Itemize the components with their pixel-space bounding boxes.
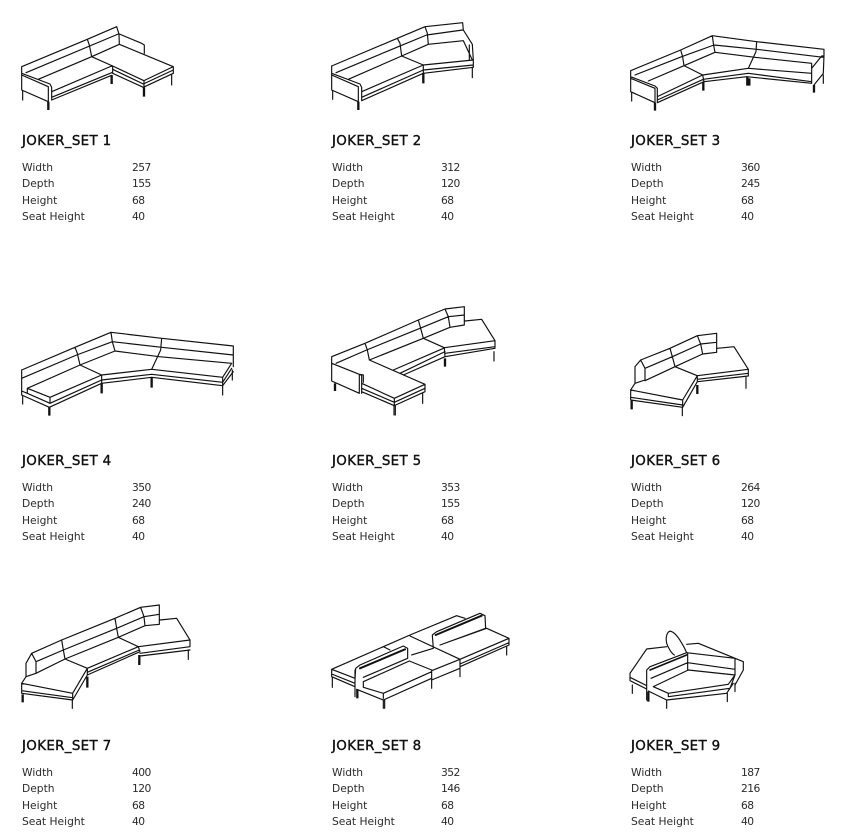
specs: set 9: 40 <box>741 815 754 828</box>
specs: set 7: Depth <box>22 782 55 795</box>
specs: set 9: Depth <box>631 782 664 795</box>
specs: set 6: Width <box>631 481 662 494</box>
specs: set 2: Seat Height <box>332 210 395 223</box>
specs: set 3: JOKER_SET 3 <box>630 134 720 149</box>
specs: set 8: JOKER_SET 8 <box>331 739 422 754</box>
specs: set 1: 40 <box>132 210 145 223</box>
specs: set 3: 245 <box>741 177 760 190</box>
specs: set 8: 352 <box>441 766 460 779</box>
specs: set 9: JOKER_SET 9 <box>630 739 720 754</box>
specs: set 2: Height <box>332 194 367 207</box>
specs: set 1: Depth <box>22 177 55 190</box>
specs: set 8: Seat Height <box>332 815 395 828</box>
sofa illustration: set 3 <box>631 36 824 111</box>
specs: set 4: 350 <box>132 481 151 494</box>
specs: set 7: 120 <box>132 782 151 795</box>
specs: set 2: JOKER_SET 2 <box>331 134 422 149</box>
specs: set 4: Height <box>22 514 57 527</box>
specs: set 2: 120 <box>441 177 460 190</box>
specs: set 4: 240 <box>132 497 151 510</box>
specs: set 5: 68 <box>441 514 454 527</box>
sofa illustration: set 6 <box>631 333 748 416</box>
specs: set 9: 68 <box>741 799 754 812</box>
specs: set 7: 400 <box>132 766 151 779</box>
specs: set 7: 68 <box>132 799 145 812</box>
specs: set 3: Width <box>631 161 662 174</box>
sofa illustration: set 9 <box>630 631 743 708</box>
specs: set 8: 40 <box>441 815 454 828</box>
specs: set 4: Seat Height <box>22 530 85 543</box>
specs: set 7: 40 <box>132 815 145 828</box>
specs: set 8: 146 <box>441 782 460 795</box>
specs: set 1: 155 <box>132 177 151 190</box>
specs: set 6: 40 <box>741 530 754 543</box>
specs: set 5: 40 <box>441 530 454 543</box>
specs: set 2: Width <box>332 161 363 174</box>
specs: set 8: 68 <box>441 799 454 812</box>
sofa illustration: set 8 <box>332 613 509 708</box>
specs: set 7 <box>21 739 151 828</box>
specs: set 4: JOKER_SET 4 <box>21 454 112 469</box>
specs: set 6: 68 <box>741 514 754 527</box>
specs: set 5: Depth <box>332 497 365 510</box>
specs: set 2: 40 <box>441 210 454 223</box>
specs: set 3 <box>630 134 760 223</box>
specs: set 3: 68 <box>741 194 754 207</box>
specs: set 7: Seat Height <box>22 815 85 828</box>
sofa illustration: set 5 <box>332 307 495 415</box>
specs: set 6: Seat Height <box>631 530 694 543</box>
sofa illustration: set 1 <box>22 27 173 110</box>
specs: set 2: 68 <box>441 194 454 207</box>
specs: set 9 <box>630 739 760 828</box>
specs: set 6 <box>630 454 760 543</box>
specs: set 5: Width <box>332 481 363 494</box>
specs: set 2 <box>331 134 460 223</box>
specs: set 1: Width <box>22 161 53 174</box>
specs: set 1: 257 <box>132 161 151 174</box>
specs: set 6: Depth <box>631 497 664 510</box>
specs: set 2: 312 <box>441 161 460 174</box>
specs: set 7: Height <box>22 799 57 812</box>
specs: set 8: Height <box>332 799 367 812</box>
specs: set 3: 360 <box>741 161 760 174</box>
specs: set 3: 40 <box>741 210 754 223</box>
specs: set 8: Width <box>332 766 363 779</box>
specs: set 5: Height <box>332 514 367 527</box>
specs: set 9: Height <box>631 799 666 812</box>
specs: set 9: 216 <box>741 782 760 795</box>
specs: set 6: Height <box>631 514 666 527</box>
specs: set 4: 68 <box>132 514 145 527</box>
specs: set 3: Height <box>631 194 666 207</box>
specs: set 9: Seat Height <box>631 815 694 828</box>
specs: set 5: 155 <box>441 497 460 510</box>
specs: set 1: 68 <box>132 194 145 207</box>
specs: set 3: Seat Height <box>631 210 694 223</box>
specs: set 5: Seat Height <box>332 530 395 543</box>
specs: set 4: Depth <box>22 497 55 510</box>
specs: set 1 <box>21 134 151 223</box>
specs: set 2: Depth <box>332 177 365 190</box>
specs: set 1: Seat Height <box>22 210 85 223</box>
sofa illustration: set 7 <box>22 605 190 708</box>
specs: set 7: JOKER_SET 7 <box>21 739 112 754</box>
specs: set 8: Depth <box>332 782 365 795</box>
specs: set 5: JOKER_SET 5 <box>331 454 422 469</box>
specs: set 6: 120 <box>741 497 760 510</box>
specs: set 1: Height <box>22 194 57 207</box>
specs: set 5 <box>331 454 460 543</box>
specs: set 7: Width <box>22 766 53 779</box>
specs: set 9: Width <box>631 766 662 779</box>
sofa illustration: set 4 <box>22 332 233 416</box>
specs: set 9: 187 <box>741 766 760 779</box>
specs: set 6: 264 <box>741 481 760 494</box>
specs: set 6: JOKER_SET 6 <box>630 454 720 469</box>
sofa illustration: set 2 <box>332 23 473 110</box>
specs: set 4 <box>21 454 151 543</box>
specs: set 5: 353 <box>441 481 460 494</box>
specs: set 4: 40 <box>132 530 145 543</box>
specs: set 3: Depth <box>631 177 664 190</box>
specs: set 4: Width <box>22 481 53 494</box>
specs: set 1: JOKER_SET 1 <box>21 134 112 149</box>
specs: set 8 <box>331 739 460 828</box>
